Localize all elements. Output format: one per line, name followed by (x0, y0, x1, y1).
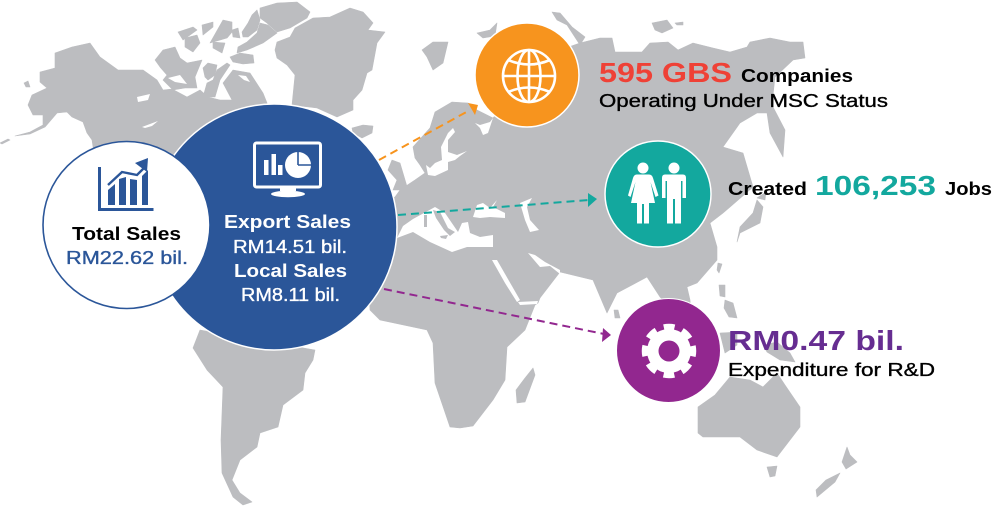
Tasmania (767, 466, 777, 477)
companies label: Companies (741, 65, 853, 86)
expenditure label: Expenditure for R&D (728, 359, 935, 380)
Sardinia (424, 215, 427, 227)
local sales value: RM8.11 bil. (241, 285, 340, 305)
Australia (698, 373, 800, 457)
New Zealand (842, 447, 857, 469)
United Kingdom (388, 160, 408, 190)
Red Sea (492, 260, 520, 302)
Italy and Sardinia (424, 210, 455, 239)
South America (193, 330, 315, 505)
Sicily (440, 235, 448, 239)
Franz Josef Land (477, 23, 497, 38)
Japan (737, 200, 763, 242)
Italy (433, 210, 455, 236)
local sales text: Local Sales (234, 261, 347, 281)
RM0.47 bil. figure: RM0.47 bil. (728, 325, 904, 356)
created label: Created (728, 178, 807, 199)
arrow: to purple circle (384, 289, 611, 342)
icon: globe (503, 50, 555, 102)
total sales label: Total Sales (72, 223, 181, 244)
Alaska island chain (0, 139, 10, 144)
icon: woman and man (628, 162, 686, 224)
Taiwan (717, 263, 722, 273)
Greenland (275, 8, 385, 117)
seas and lakes (137, 75, 560, 305)
Baltic Sea (426, 128, 467, 176)
export sales text: Export Sales (224, 212, 351, 232)
Great Lakes (137, 94, 150, 102)
icon: gear (646, 328, 692, 374)
total sales value: RM22.62 bil. (66, 248, 188, 268)
Great Slave Lake (142, 121, 158, 128)
Gulf between Arctic islands (168, 75, 187, 84)
White Sea (475, 118, 493, 135)
Svalbard (422, 42, 448, 70)
Iceland (352, 125, 373, 138)
Philippines (719, 285, 737, 318)
106,253 figure: 106,253 (815, 170, 936, 201)
North America (15, 43, 267, 170)
icon: monitor with charts (254, 143, 320, 197)
jobs label: Jobs (945, 178, 992, 199)
Sri Lanka (614, 310, 620, 318)
Black Sea (473, 200, 505, 218)
arrow: to teal circle (398, 193, 597, 215)
panel: total sales (43, 142, 210, 308)
New Zealand south island (816, 473, 840, 497)
export sales value: RM14.51 bil. (233, 237, 347, 257)
Caspian Sea (520, 198, 539, 232)
Gulf of Aden (518, 301, 538, 305)
panel: export and local sales (151, 104, 397, 350)
Severnaya Zemlya (652, 20, 673, 33)
Novaya Zemlya (552, 12, 585, 45)
panel: R&D expenditure (616, 298, 935, 402)
Hokkaido (757, 192, 766, 200)
icon: rising bar chart (98, 158, 154, 211)
small northern island (675, 22, 683, 25)
Madagascar (516, 368, 535, 403)
inner Canadian bay (238, 75, 250, 82)
Afro-Eurasia (369, 38, 805, 428)
operating under MSC status: Operating Under MSC Status (599, 90, 888, 111)
New Guinea (763, 342, 795, 362)
panel: GBS companies (475, 23, 888, 127)
Arctic islands (24, 2, 310, 97)
Persian Gulf (528, 253, 560, 274)
Hainan (688, 278, 693, 284)
panel: jobs created (605, 141, 992, 247)
arrow: to orange circle (379, 103, 478, 160)
Mediterranean Sea (397, 207, 493, 252)
Borneo (720, 332, 737, 353)
595 GBS figure: 595 GBS (599, 57, 732, 88)
